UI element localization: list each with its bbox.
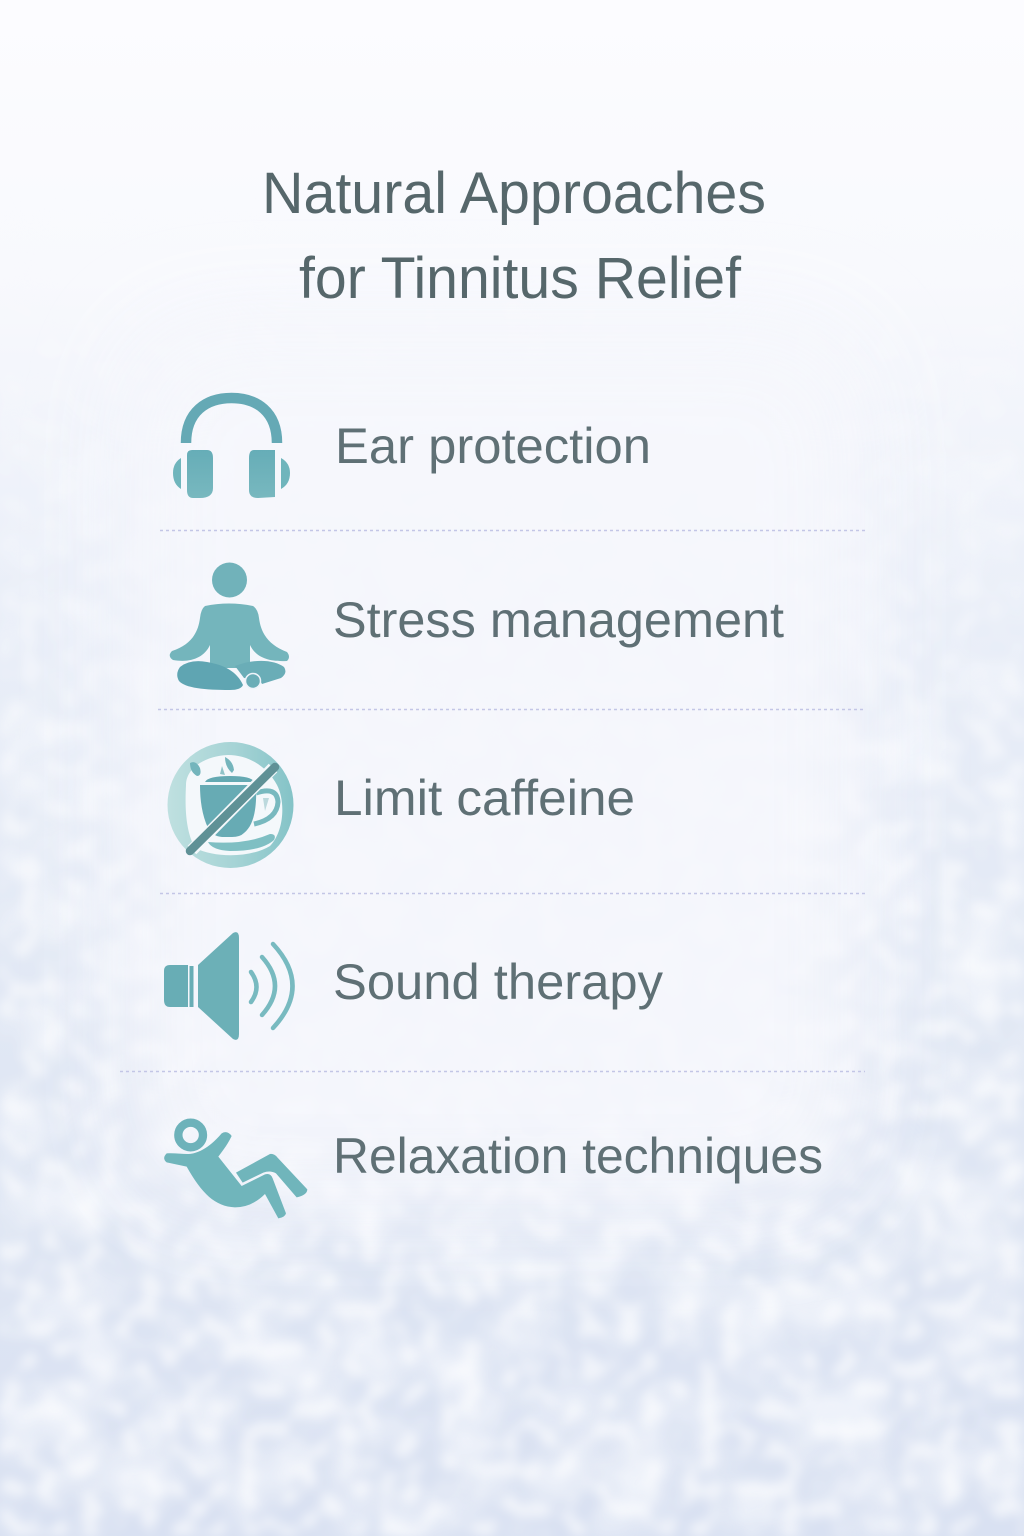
- icon: headphones: [173, 398, 290, 498]
- row: relaxation techniques: [164, 1123, 823, 1218]
- label: ear protection: Ear protection: [335, 418, 651, 474]
- icon: reclining person: [164, 1123, 307, 1218]
- label: stress management: Stress management: [333, 592, 784, 648]
- label: sound therapy: Sound therapy: [333, 954, 663, 1010]
- icon: no coffee: [168, 742, 294, 868]
- label: relaxation techniques: Relaxation techniques: [333, 1128, 823, 1184]
- icon: meditating person: [170, 562, 289, 690]
- row: limit caffeine: [168, 742, 635, 868]
- title: [262, 161, 766, 311]
- title: Natural Approaches: [262, 161, 766, 226]
- row: sound therapy: [164, 932, 663, 1040]
- label: limit caffeine: Limit caffeine: [334, 770, 635, 826]
- title: for Tinnitus Relief: [299, 246, 742, 311]
- row: stress management: [170, 562, 784, 690]
- row: ear protection: [173, 398, 651, 498]
- icon: speaker: [164, 932, 292, 1040]
